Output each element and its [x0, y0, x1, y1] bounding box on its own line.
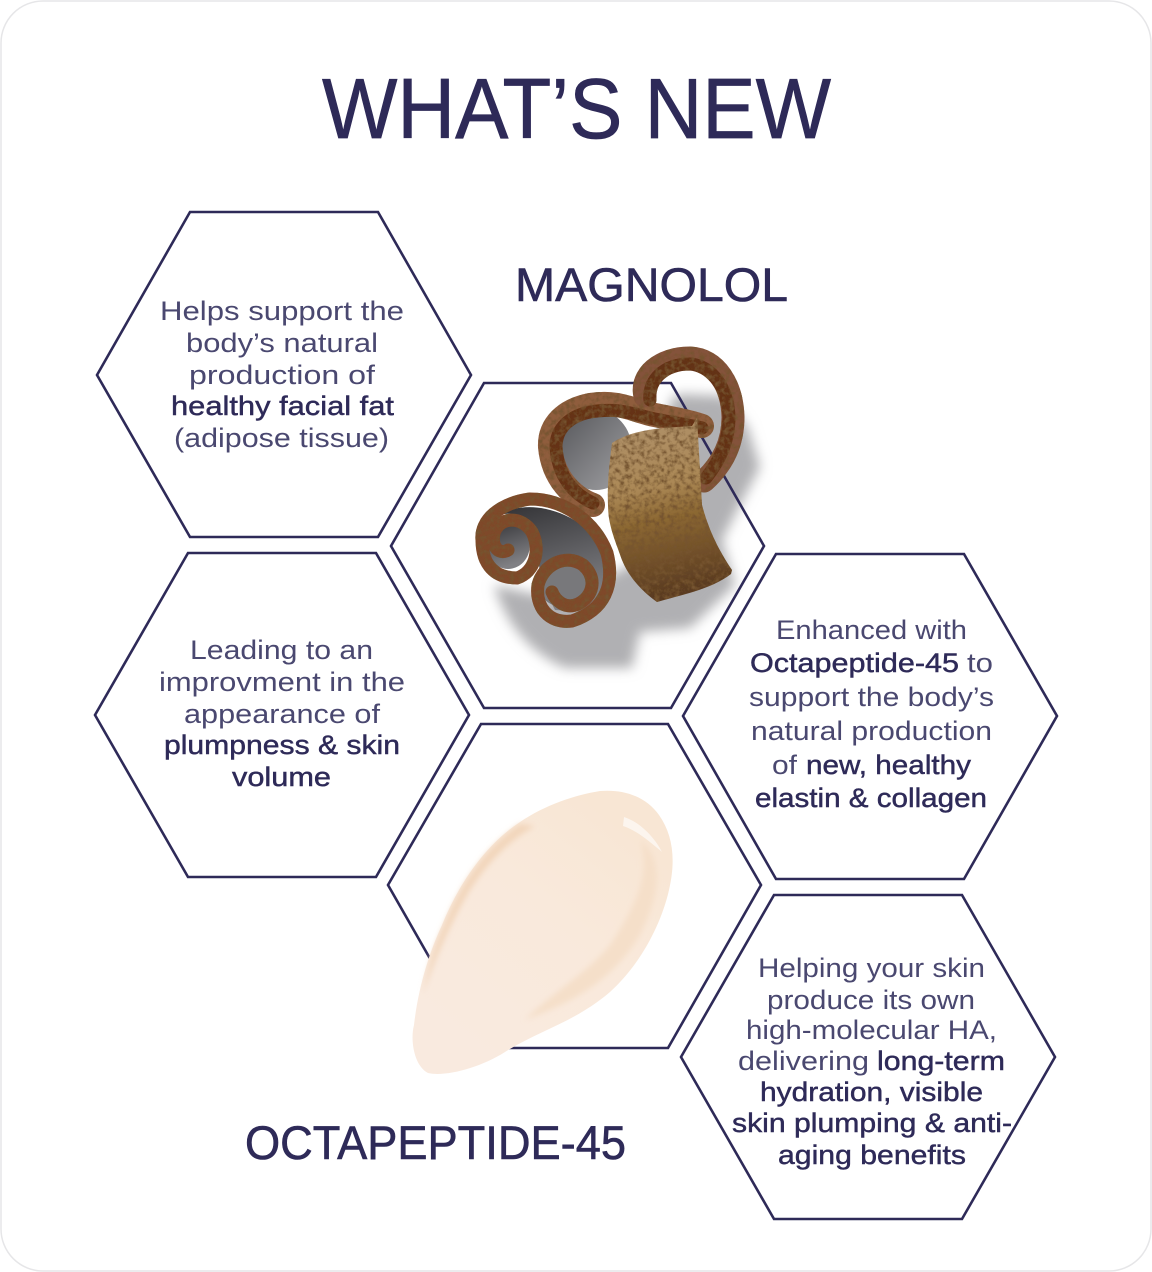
hexagon: octapeptide-45 benefits: of	[772, 750, 798, 780]
hexagon: healthy facial fat: Helps support the	[160, 296, 404, 326]
hexagon: plumpness and volume: appearance of	[184, 699, 381, 729]
image: cream swatch	[413, 791, 673, 1074]
hexagon: healthy facial fat	[97, 212, 471, 537]
hexagon: hyaluronic acid benefits: long-term	[877, 1046, 1005, 1076]
hexagon: hyaluronic acid benefits: aging benefits	[778, 1140, 966, 1170]
hexagon: octapeptide-45 benefits	[683, 554, 1057, 879]
hexagon: healthy facial fat: body’s natural	[186, 328, 378, 358]
hexagon: hyaluronic acid benefits: high-molecular HA,	[746, 1015, 997, 1045]
hexagon: magnolol image frame	[391, 383, 764, 708]
hexagon: hyaluronic acid benefits	[681, 895, 1055, 1219]
hexagon: cream image frame	[388, 724, 761, 1048]
hexagon: octapeptide-45 benefits: Octapeptide-45	[750, 648, 959, 678]
hexagon: hyaluronic acid benefits: Helping your skin	[758, 953, 985, 983]
hexagon: octapeptide-45 benefits: natural production	[751, 716, 992, 746]
hexagon: plumpness and volume	[95, 553, 469, 877]
hexagon: hyaluronic acid benefits: skin plumping & anti-	[732, 1108, 1012, 1138]
image: magnolia bark pieces	[482, 358, 733, 621]
heading: magnolol: MAGNOLOL	[515, 258, 788, 311]
hexagon: plumpness and volume: Leading to an	[190, 635, 373, 665]
hexagon: hyaluronic acid benefits: produce its own	[767, 985, 975, 1015]
hexagon: hyaluronic acid benefits: delivering	[738, 1046, 869, 1076]
bark cast shadow	[494, 394, 760, 668]
hexagon: octapeptide-45 benefits: to	[967, 648, 993, 678]
heading: octapeptide-45: OCTAPEPTIDE-45	[245, 1116, 626, 1169]
hexagon: healthy facial fat: (adipose tissue)	[174, 423, 389, 453]
hexagon: plumpness and volume: plumpness & skin	[164, 730, 400, 760]
hexagon: healthy facial fat: healthy facial fat	[171, 391, 395, 421]
hexagon: octapeptide-45 benefits: elastin & collagen	[755, 783, 987, 813]
title: WHAT’S NEW	[322, 62, 831, 157]
hexagon: healthy facial fat: production of	[189, 360, 376, 390]
hexagon: octapeptide-45 benefits: Enhanced with	[776, 615, 967, 645]
hexagon: octapeptide-45 benefits: new, healthy	[806, 750, 972, 780]
hexagon: hyaluronic acid benefits: hydration, visible	[760, 1077, 983, 1107]
hexagon: plumpness and volume: improvment in the	[159, 667, 405, 697]
hexagon: plumpness and volume: volume	[232, 762, 331, 792]
hexagon: octapeptide-45 benefits: support the body’s	[749, 682, 994, 712]
